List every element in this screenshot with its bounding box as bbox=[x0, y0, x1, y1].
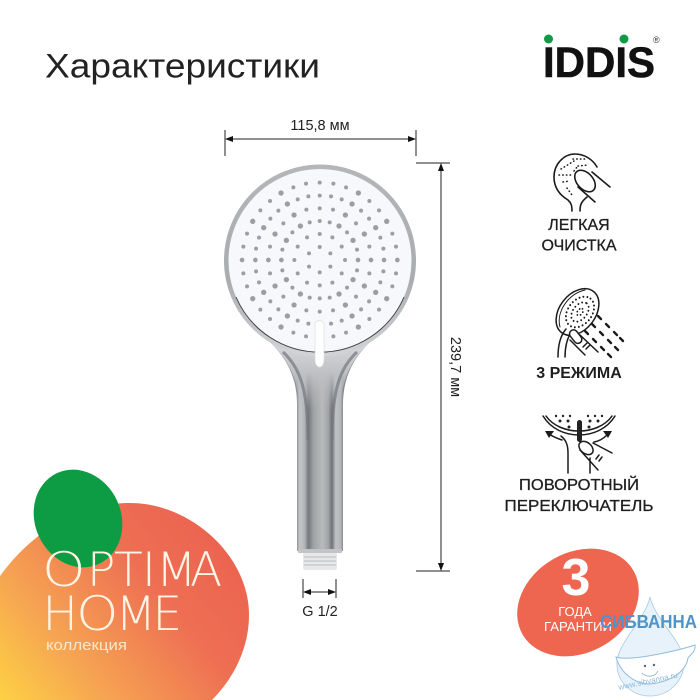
collection title: O bbox=[42, 543, 86, 598]
watermark: Sibvanna: www.sibvanna.ru bbox=[617, 671, 679, 692]
watermark: Sibvanna bbox=[600, 597, 697, 696]
icon: rotary switch bbox=[543, 415, 615, 473]
neck flare bbox=[262, 334, 378, 410]
face shadow line bbox=[236, 297, 404, 352]
collection title: ME bbox=[116, 587, 182, 642]
icon: easy cleaning bbox=[554, 154, 610, 211]
collection title: H bbox=[42, 587, 78, 642]
width dimension: 115,8 мм bbox=[290, 118, 350, 134]
neck shading bbox=[283, 352, 357, 440]
collection title: O bbox=[76, 586, 119, 641]
thread dimension: G 1/2 bbox=[302, 604, 338, 620]
head rim bbox=[224, 164, 416, 356]
label: rotary switch: ПЕРЕКЛЮЧАТЕЛЬ bbox=[504, 498, 654, 515]
collection caption: коллекция bbox=[46, 638, 127, 654]
logo: IDDIS: ® bbox=[653, 35, 660, 45]
icon: three modes bbox=[547, 280, 623, 357]
warranty badge: ГОДА bbox=[558, 604, 592, 619]
label: easy cleaning: ЛЕГКАЯ bbox=[548, 217, 610, 234]
title: Характеристики bbox=[45, 48, 320, 86]
mode lever bbox=[315, 320, 324, 367]
watermark: Sibvanna: СИБВАННА bbox=[600, 612, 697, 632]
width dimension bbox=[225, 118, 416, 156]
collection blob bbox=[0, 503, 249, 700]
thread dimension bbox=[302, 579, 338, 620]
threaded connector bbox=[298, 549, 342, 570]
collection title: PTIMA bbox=[87, 543, 222, 598]
warranty badge: 3 bbox=[562, 549, 590, 607]
spray holes bbox=[240, 181, 400, 338]
green accent blob bbox=[18, 455, 138, 582]
head face bbox=[228, 169, 412, 352]
logo: IDDIS: IDDIS bbox=[543, 39, 655, 87]
label: easy cleaning bbox=[541, 217, 617, 254]
warranty badge bbox=[498, 527, 658, 678]
warranty badge: ГАРАНТИИ bbox=[544, 619, 612, 634]
handle bbox=[258, 330, 382, 551]
height dimension bbox=[416, 163, 463, 571]
height dimension: 239,7 мм bbox=[447, 337, 463, 397]
shower head bbox=[224, 164, 416, 570]
label: three modes: 3 РЕЖИМА bbox=[536, 365, 622, 382]
label: rotary switch bbox=[504, 475, 654, 515]
label: rotary switch: ПОВОРОТНЫЙ bbox=[519, 475, 639, 494]
label: easy cleaning: ОЧИСТКА bbox=[541, 238, 617, 254]
collection title bbox=[42, 543, 222, 642]
